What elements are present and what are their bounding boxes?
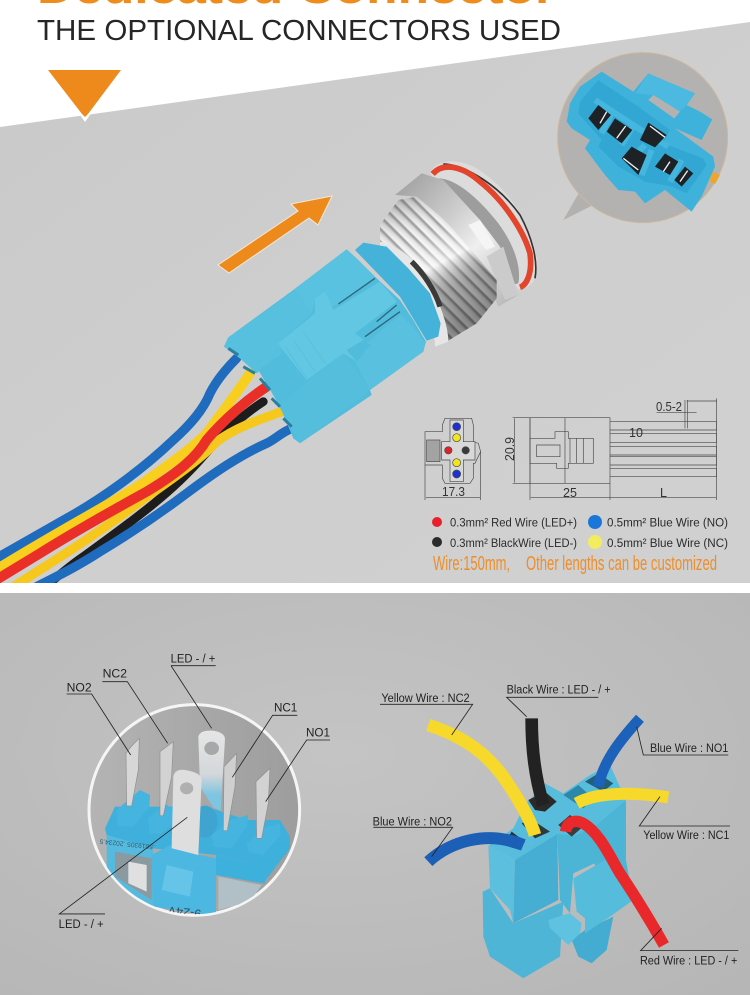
pins bbox=[126, 738, 139, 806]
switch: metal push button body bbox=[380, 161, 537, 347]
switch: blue connector housing bbox=[224, 243, 441, 443]
legend: wire colors: 0.5mm² Blue Wire (NO) bbox=[607, 516, 728, 530]
lower block bbox=[258, 353, 370, 443]
terminal labels: NO2 bbox=[67, 681, 92, 695]
upper blocks bbox=[224, 249, 375, 373]
connector body bbox=[483, 765, 633, 978]
wire labels: Blue Wire : NO1 bbox=[650, 741, 729, 755]
dimension labels: 10 bbox=[629, 426, 643, 440]
panel: switch terminals bbox=[59, 652, 330, 931]
housing base bbox=[224, 249, 426, 443]
terminal labels bbox=[59, 652, 330, 931]
wire labels bbox=[373, 682, 737, 968]
bubble backdrop bbox=[558, 53, 728, 223]
leader lines bbox=[59, 666, 330, 914]
chrome collar bbox=[380, 242, 448, 347]
wire labels: Red Wire : LED - / + bbox=[640, 954, 737, 968]
nut bbox=[395, 173, 518, 307]
dimension labels: 17.3 bbox=[442, 485, 465, 499]
switch body bbox=[99, 731, 290, 921]
switch body: 9-24V bbox=[166, 903, 202, 921]
wire labels: Black Wire : LED - / + bbox=[507, 682, 611, 696]
dimension drawing bbox=[425, 398, 717, 500]
note: wire length bbox=[433, 553, 717, 575]
terminal labels: NC1 bbox=[274, 701, 298, 715]
pedestals bbox=[200, 806, 218, 838]
note: wire length: Wire:150mm, bbox=[433, 553, 510, 575]
dimension labels: 20.9 bbox=[503, 437, 517, 461]
printed text: .5019305 .20234.5 bbox=[99, 837, 155, 850]
icon: orange insertion arrow bbox=[218, 196, 332, 273]
wire labels: Yellow Wire : NC1 bbox=[643, 828, 730, 842]
orange wire tip bbox=[710, 172, 720, 184]
photo: wire harness bbox=[0, 358, 292, 587]
legend: wire colors: 0.5mm² Blue Wire (NC) bbox=[607, 536, 728, 550]
terminal labels: LED - / + bbox=[59, 917, 104, 931]
terminal labels: NO1 bbox=[306, 726, 330, 740]
red ring bbox=[433, 167, 531, 287]
dimension labels: L bbox=[660, 486, 667, 500]
wires bbox=[428, 718, 668, 945]
terminal labels: NC2 bbox=[103, 667, 127, 681]
dimension labels: 0.5-2 bbox=[656, 400, 682, 414]
slits bbox=[338, 278, 400, 337]
terminal labels: LED - / + bbox=[171, 652, 215, 666]
bezel bbox=[430, 161, 537, 289]
legend: wire colors bbox=[432, 515, 728, 550]
right block bbox=[355, 315, 425, 390]
heading: the optional connectors used: THE OPTIONAL CONNECTORS USED bbox=[37, 15, 561, 47]
connector face bbox=[567, 72, 715, 212]
background: grey lower panel bbox=[0, 593, 750, 995]
background: grey top panel bbox=[0, 22, 750, 583]
panel: wired connector bbox=[373, 682, 738, 978]
legend: wire colors: 0.3mm² BlackWire (LED-) bbox=[450, 536, 577, 550]
legend: wire colors: 0.3mm² Red Wire (LED+) bbox=[450, 516, 577, 530]
circle backdrop bbox=[89, 705, 300, 915]
sockets bbox=[228, 348, 292, 427]
front connector outline bbox=[425, 418, 481, 500]
dimension labels: 25 bbox=[563, 486, 577, 500]
wire labels: Blue Wire : NO2 bbox=[373, 814, 452, 828]
thread bbox=[380, 197, 497, 341]
side connector outline bbox=[513, 398, 717, 500]
wire leader lines bbox=[373, 697, 738, 951]
icon: orange down triangle bbox=[48, 70, 121, 122]
callout: connector close-up bubble bbox=[558, 53, 728, 223]
dimension labels bbox=[442, 400, 682, 500]
wire labels: Yellow Wire : NC2 bbox=[381, 691, 470, 705]
collar bbox=[355, 243, 441, 341]
slider latch bbox=[278, 282, 397, 380]
